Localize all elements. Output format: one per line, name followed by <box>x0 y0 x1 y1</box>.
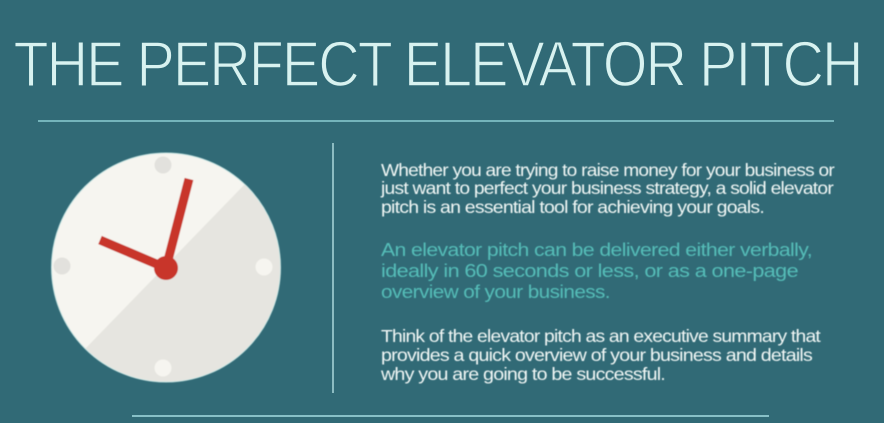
clock face <box>52 153 280 382</box>
paragraph 1: pitch is an essential tool for achieving your goals. <box>381 197 764 217</box>
paragraph 3: provides a quick overview of your business and details <box>381 345 813 365</box>
hour markers <box>54 156 272 376</box>
paragraph 2: ideally in 60 seconds or less, or as a one-page <box>381 261 799 281</box>
clock face shaded half <box>86 186 280 382</box>
paragraph 2 <box>381 240 812 302</box>
paragraph 3: Think of the elevator pitch as an executive summary that <box>381 326 821 346</box>
icon: clock <box>52 153 280 382</box>
paragraph 2: overview of your business. <box>381 282 610 302</box>
paragraph 3: why you are going to be successful. <box>380 364 665 384</box>
paragraph 1: just want to perfect your business strategy, a solid elevator <box>380 178 834 198</box>
paragraph 1: Whether you are trying to raise money for your business or <box>381 160 835 180</box>
paragraph 2: An elevator pitch can be delivered either verbally, <box>381 240 812 260</box>
paragraph 3 <box>380 326 821 384</box>
paragraph 1 <box>380 160 835 217</box>
clock hands <box>100 179 189 280</box>
